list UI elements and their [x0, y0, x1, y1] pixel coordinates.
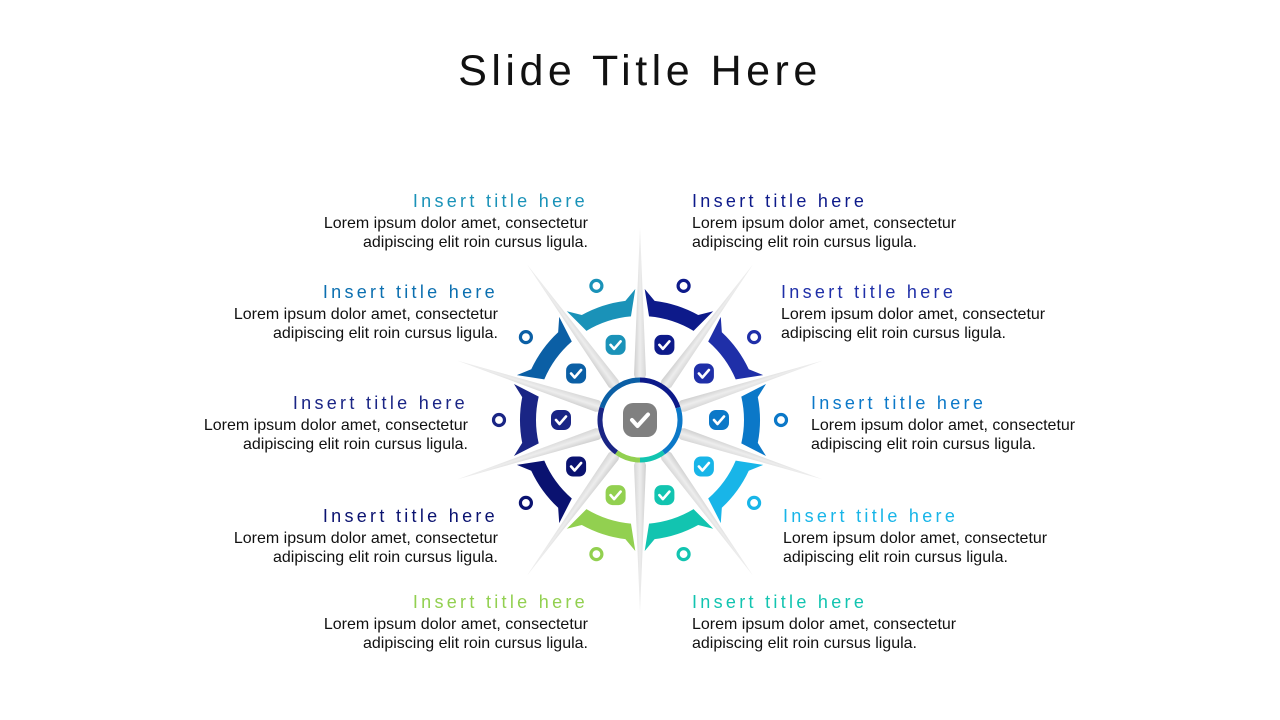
text block: row3 left: Insert title here	[293, 393, 468, 413]
text block: top left: adipiscing elit roin cursus ligula.	[363, 234, 588, 251]
title: Slide Title Here	[458, 47, 822, 95]
text block: row2 left: adipiscing elit roin cursus ligula.	[273, 325, 498, 342]
text block: row3 right: Insert title here	[811, 393, 986, 413]
text block: row2 left: Insert title here	[323, 282, 498, 302]
text block: row3 left: adipiscing elit roin cursus ligula.	[243, 436, 468, 453]
text block: row2 right: Lorem ipsum dolor amet, consectetur	[781, 306, 1045, 323]
text block: top right: Insert title here	[692, 191, 867, 211]
text block: bottom right	[692, 592, 956, 652]
text block: row4 left: adipiscing elit roin cursus ligula.	[273, 549, 498, 566]
text block: bottom left: Lorem ipsum dolor amet, consectetur	[324, 616, 588, 633]
text block: row4 left: Lorem ipsum dolor amet, consectetur	[234, 530, 498, 547]
text block: top left: Insert title here	[413, 191, 588, 211]
center ring	[600, 380, 680, 460]
small circles	[494, 280, 786, 560]
text block: row2 left: Lorem ipsum dolor amet, consectetur	[234, 306, 498, 323]
text block: top right: Lorem ipsum dolor amet, consectetur	[692, 215, 956, 232]
text block: top right: adipiscing elit roin cursus ligula.	[692, 234, 917, 251]
text block: top right	[692, 191, 956, 251]
text block: top left: Lorem ipsum dolor amet, consectetur	[324, 215, 588, 232]
text block: top left	[324, 191, 588, 251]
text block: row4 right: Insert title here	[783, 506, 958, 526]
text block: row3 right: Lorem ipsum dolor amet, consectetur	[811, 417, 1075, 434]
text block: row4 right	[783, 506, 1047, 566]
text block: bottom right: adipiscing elit roin cursus ligula.	[692, 635, 917, 652]
text block: row4 right: Lorem ipsum dolor amet, consectetur	[783, 530, 1047, 547]
text block: row3 right: adipiscing elit roin cursus ligula.	[811, 436, 1036, 453]
text block: row2 left	[234, 282, 498, 342]
text block: row3 left	[204, 393, 468, 453]
text block: bottom right: Lorem ipsum dolor amet, consectetur	[692, 616, 956, 633]
text block: bottom right: Insert title here	[692, 592, 867, 612]
text block: row2 right	[781, 282, 1045, 342]
spikes	[456, 228, 824, 612]
check icons	[551, 335, 729, 505]
text block: row4 left: Insert title here	[323, 506, 498, 526]
text block: row4 left	[234, 506, 498, 566]
text block: bottom left: Insert title here	[413, 592, 588, 612]
text block: row3 left: Lorem ipsum dolor amet, consectetur	[204, 417, 468, 434]
text block: row2 right: adipiscing elit roin cursus ligula.	[781, 325, 1006, 342]
center icon	[623, 403, 657, 437]
text block: bottom left: adipiscing elit roin cursus ligula.	[363, 635, 588, 652]
text block: row4 right: adipiscing elit roin cursus ligula.	[783, 549, 1008, 566]
text block: row3 right	[811, 393, 1075, 453]
text block: bottom left	[324, 592, 588, 652]
ring segments	[514, 289, 766, 551]
text block: row2 right: Insert title here	[781, 282, 956, 302]
